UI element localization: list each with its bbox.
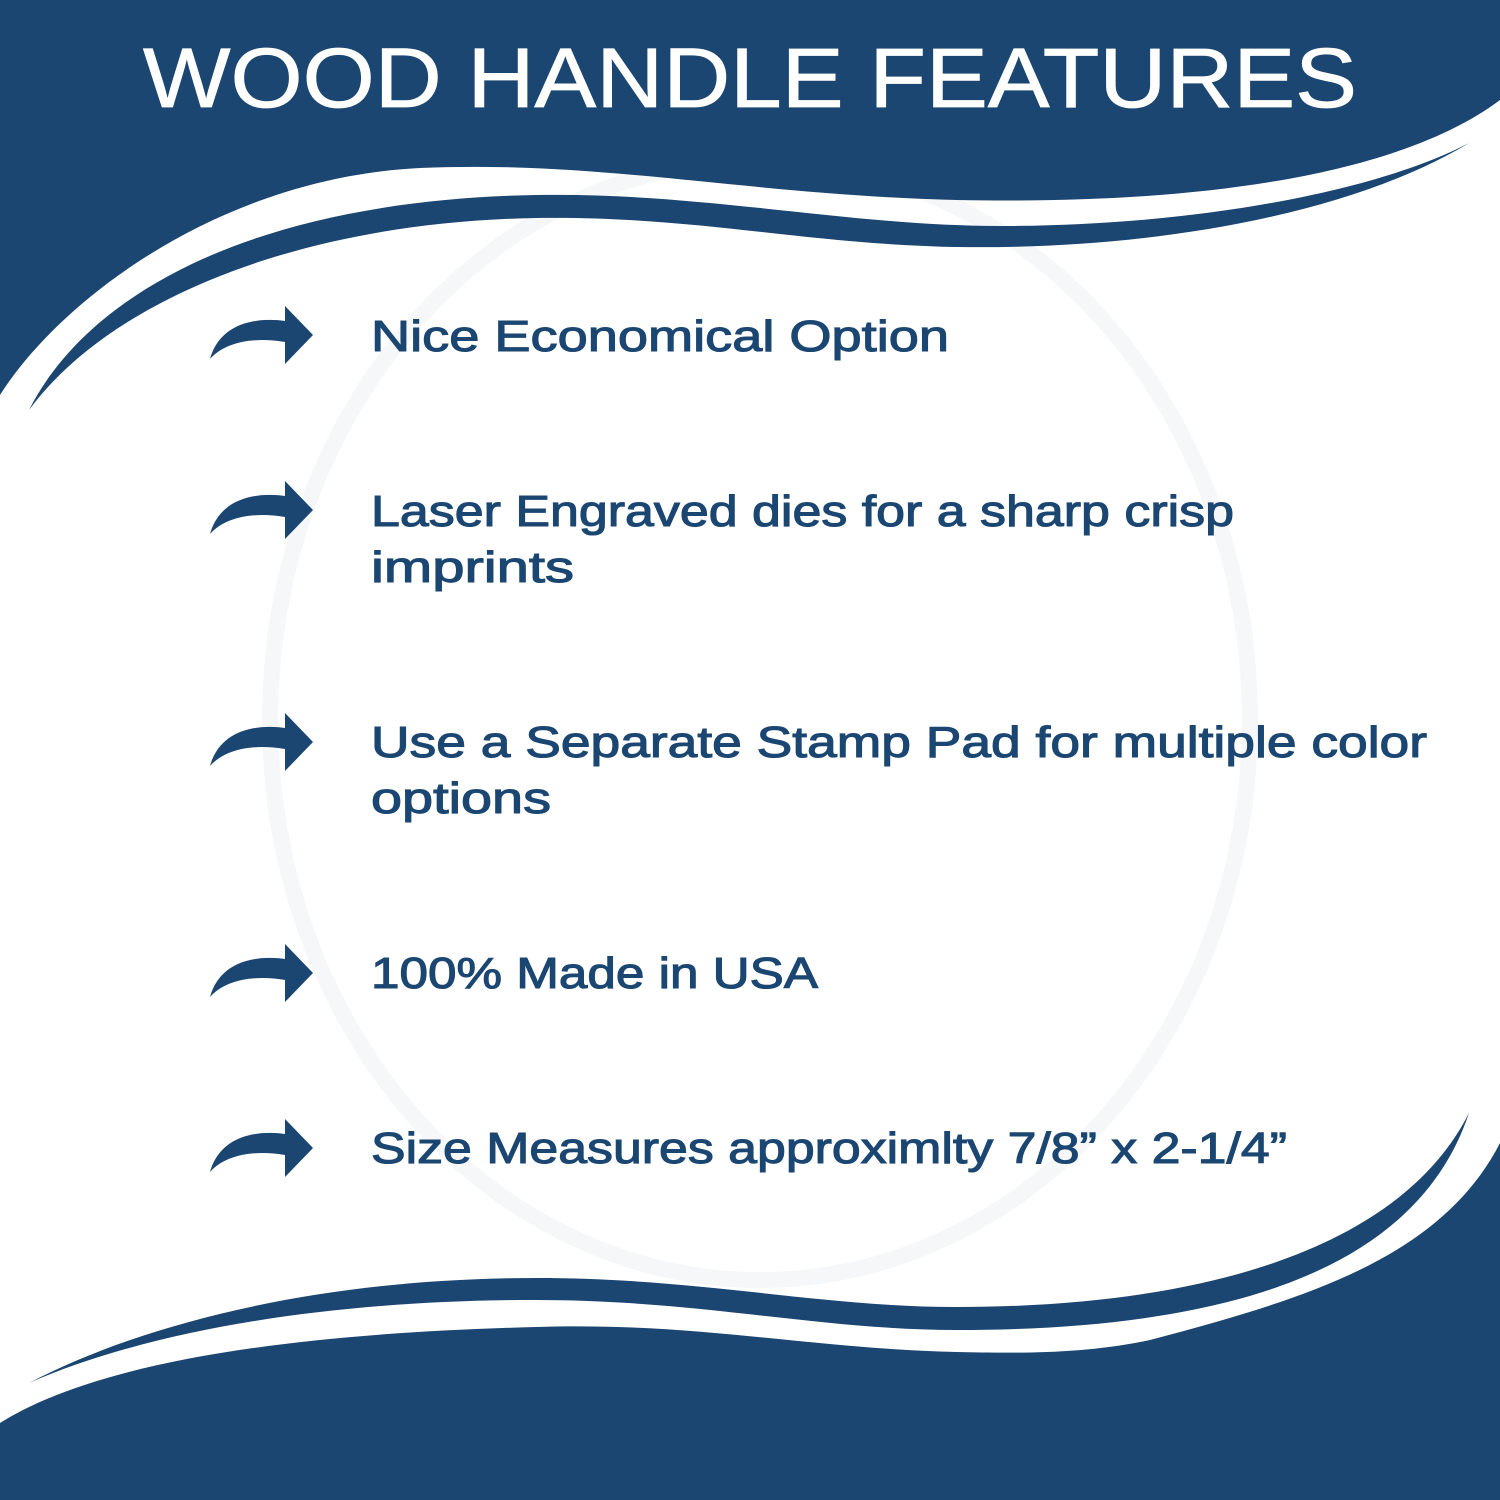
title: WOOD HANDLE FEATURES <box>143 31 1357 125</box>
text: item 3: options <box>371 774 551 823</box>
text: item 4: 100% Made in USA <box>371 949 819 998</box>
header wave band <box>0 0 1500 410</box>
item 3 <box>210 713 1427 823</box>
footer wave band <box>0 1113 1500 1500</box>
icon: arrow 5 <box>210 1119 313 1177</box>
icon: arrow 4 <box>210 944 313 1002</box>
icon: arrow 1 <box>210 306 313 364</box>
text: item 3: Use a Separate Stamp Pad for multiple color <box>371 718 1427 767</box>
watermark: faint seal <box>270 160 1250 1280</box>
item 2 <box>210 481 1234 592</box>
item 4 <box>210 944 819 1002</box>
icon: arrow 2 <box>210 481 313 539</box>
text: item 1: Nice Economical Option <box>371 312 949 361</box>
item 1 <box>210 306 949 364</box>
icon: arrow 3 <box>210 713 313 771</box>
text: item 2: Laser Engraved dies for a sharp crisp <box>371 487 1234 536</box>
text: item 5: Size Measures approximlty 7/8” x 2-1/4” <box>371 1124 1287 1173</box>
text: item 2: imprints <box>371 543 574 592</box>
item 5 <box>210 1119 1287 1177</box>
